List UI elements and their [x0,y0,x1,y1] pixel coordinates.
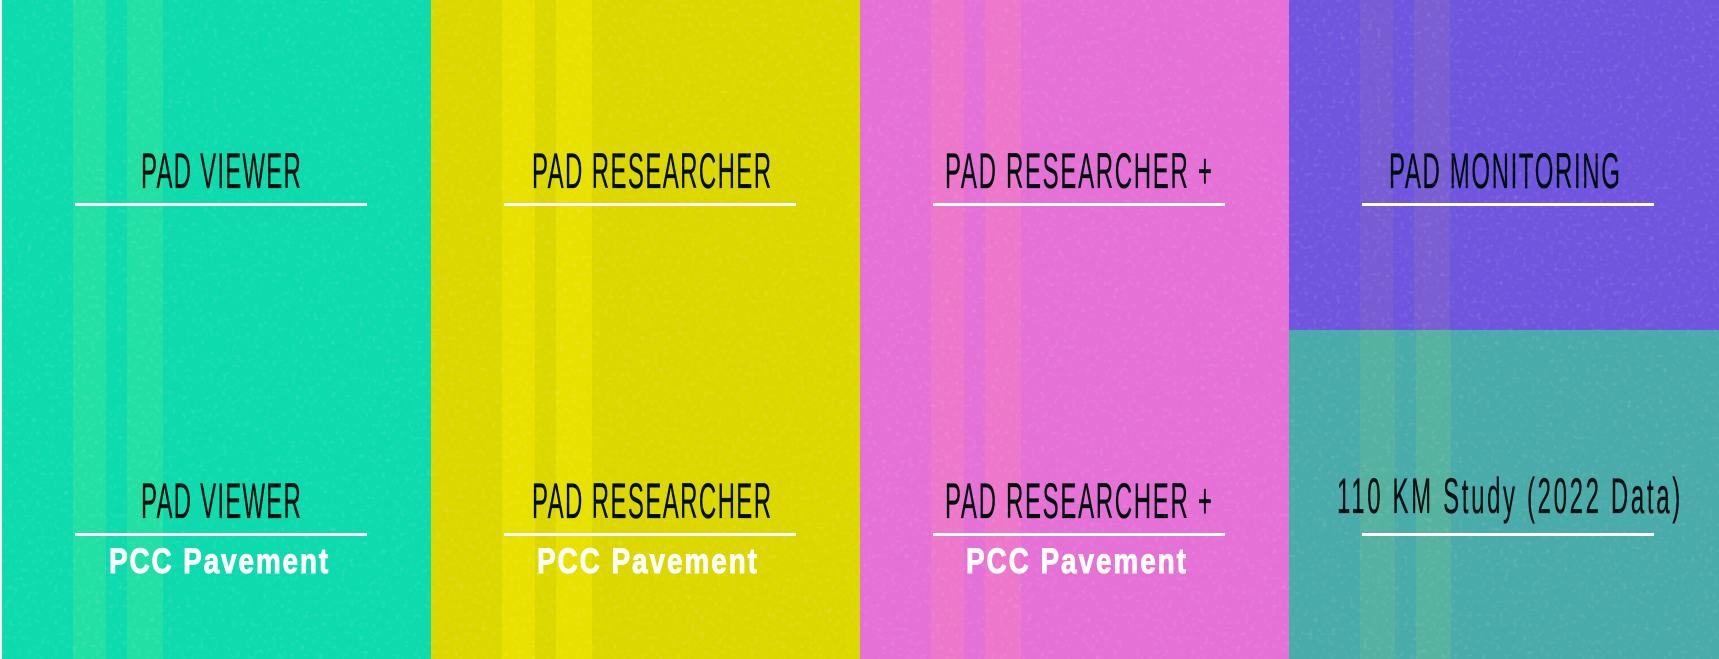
panel: PAD Viewer [2,0,431,659]
panel: PAD Researcher plus [860,0,1289,659]
heading: PAD Researcher plus bottom: PAD RESEARCHER + [945,475,1212,529]
heading: PAD Researcher plus top: PAD RESEARCHER + [945,145,1212,199]
label: PCC Pavement: PCC Pavement [109,541,329,581]
heading: 110 KM Study: 110 KM Study (2022 Data) [1337,470,1680,524]
heading: PAD Researcher bottom: PAD RESEARCHER [532,475,771,529]
label: PCC Pavement: PCC Pavement [537,541,757,581]
panel: PAD Monitoring [1289,0,1719,330]
heading: PAD Viewer bottom: PAD VIEWER [141,475,301,529]
heading: PAD Viewer top: PAD VIEWER [141,145,301,199]
label: PCC Pavement: PCC Pavement [966,541,1186,581]
heading: PAD Researcher top: PAD RESEARCHER [532,145,771,199]
panel: 110 KM Study [1289,330,1719,659]
heading: PAD Monitoring: PAD MONITORING [1389,145,1620,199]
panel: PAD Researcher [431,0,860,659]
